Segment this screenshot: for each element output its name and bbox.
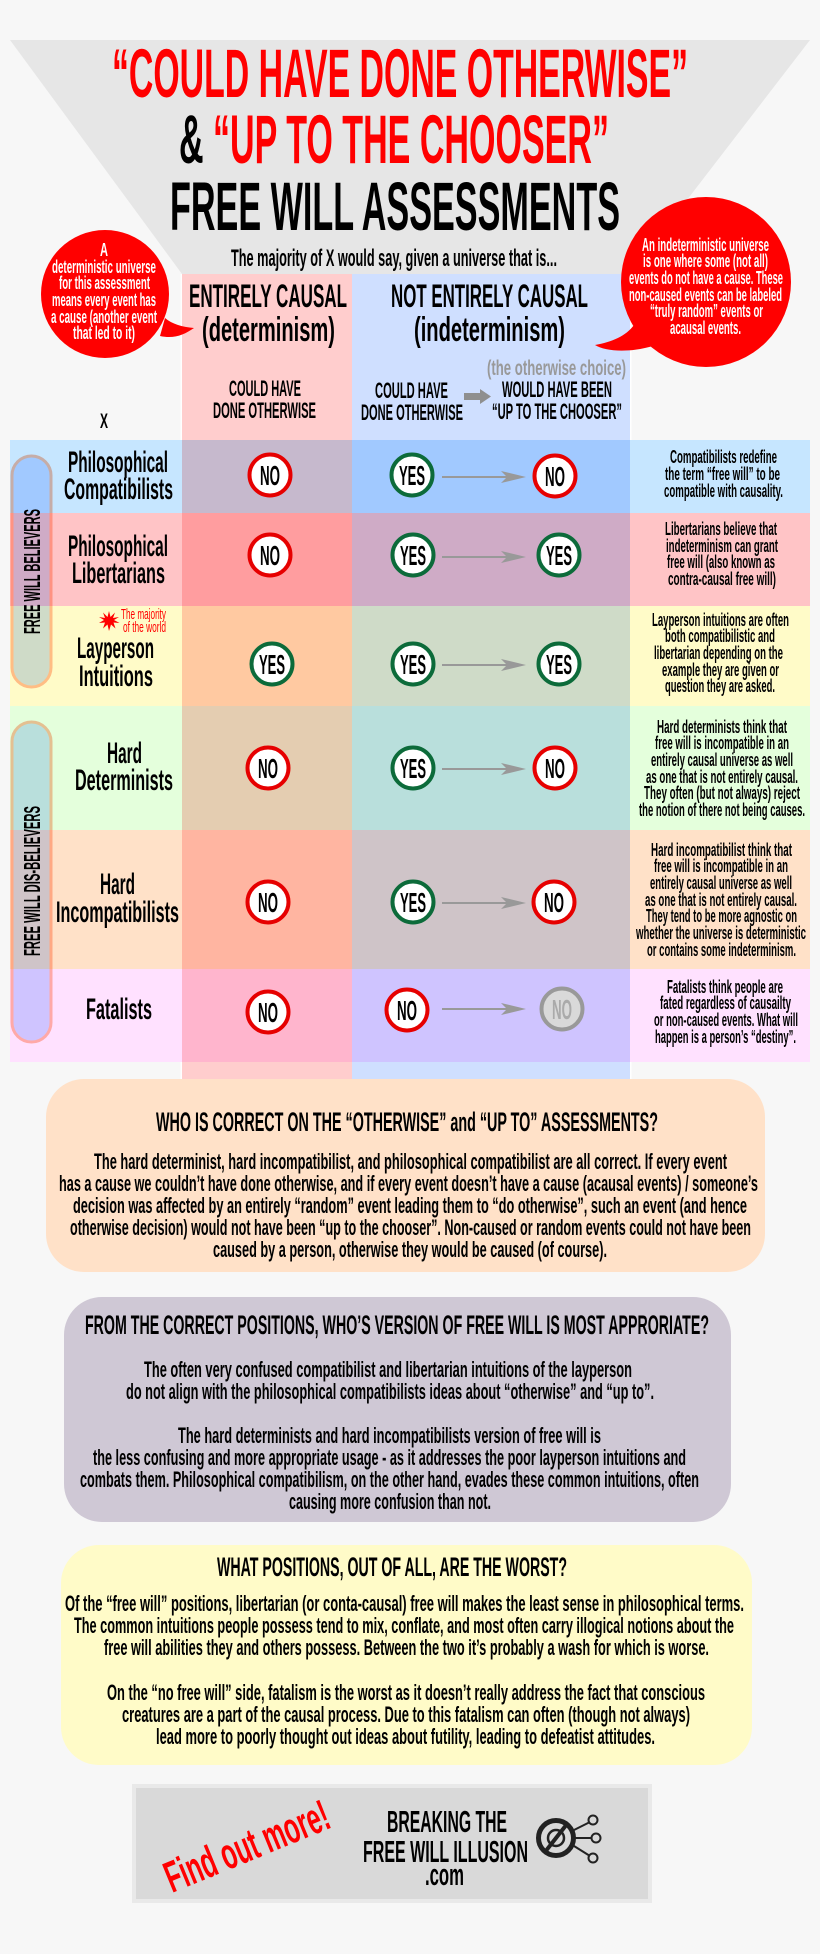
row: philosophical compatibilists: Philosophical	[68, 446, 168, 479]
arrow	[442, 1003, 526, 1015]
callout text: Find out more!	[157, 1791, 337, 1902]
column header: not entirely causal: DONE OTHERWISE	[361, 400, 463, 425]
row: fatalists: Fatalists	[86, 993, 152, 1026]
badge: yes	[392, 748, 434, 788]
row: hard determinists	[75, 717, 805, 820]
badge: no	[248, 882, 288, 922]
row: hard incompatibilists: Incompatibilists	[56, 896, 179, 929]
site name: .com	[425, 1857, 464, 1892]
panel: who is correct	[46, 1079, 765, 1272]
badge: greyed no: NO	[552, 994, 572, 1025]
description	[635, 840, 806, 960]
column header: entirely causal: (determinism)	[202, 311, 335, 349]
badge: no	[386, 990, 428, 1030]
badge: yes: YES	[400, 540, 426, 571]
row: layperson intuitions: Layperson	[77, 632, 154, 665]
description	[652, 610, 789, 696]
row: fatalists	[86, 977, 798, 1047]
row: hard incompatibilists: Hard	[100, 868, 135, 901]
row: philosophical libertarians: Philosophical	[68, 530, 168, 563]
column header: not entirely causal: “UP TO THE CHOOSER”	[492, 399, 622, 424]
column header: not entirely causal	[361, 278, 626, 425]
badge: no: NO	[260, 460, 280, 491]
row: layperson intuitions: Intuitions	[79, 660, 153, 693]
badge: no	[534, 882, 574, 922]
badge: yes	[538, 644, 580, 684]
column header: not entirely causal: (indeterminism)	[414, 311, 565, 349]
body text	[65, 1591, 744, 1749]
pill: free will dis-believers	[12, 722, 51, 1042]
column header: entirely causal: COULD HAVE	[229, 376, 301, 401]
badge: no: NO	[545, 753, 565, 784]
row: hard determinists: Hard	[107, 737, 142, 770]
badge: no: NO	[544, 887, 564, 918]
column header: entirely causal	[189, 278, 347, 423]
arrow	[442, 551, 526, 563]
text: FREE WILL BELIEVERS	[19, 509, 45, 634]
badge: no: NO	[397, 995, 417, 1026]
title	[112, 35, 688, 245]
description	[639, 717, 805, 820]
badge: yes: YES	[259, 649, 285, 680]
column header: entirely causal: ENTIRELY CAUSAL	[189, 278, 347, 314]
pill: free will believers	[12, 456, 51, 687]
arrow	[442, 471, 526, 483]
column header: not entirely causal: COULD HAVE	[375, 378, 448, 403]
callout: indeterministic universe	[595, 197, 791, 367]
column header: not entirely causal: WOULD HAVE BEEN	[502, 377, 612, 402]
callout: deterministic universe	[41, 230, 194, 358]
callout: deterministic universe: for this assessment	[59, 273, 150, 293]
badge: yes: YES	[400, 753, 426, 784]
callout: indeterministic universe: acausal events.	[670, 318, 741, 338]
description	[664, 447, 783, 501]
arrow: header	[464, 389, 491, 404]
badge: no	[534, 748, 576, 788]
badge: yes	[252, 644, 292, 684]
column header: not entirely causal: NOT ENTIRELY CAUSAL	[391, 278, 588, 314]
badge: no	[248, 748, 288, 788]
row: philosophical libertarians	[68, 519, 778, 590]
description	[665, 519, 778, 589]
callout: deterministic universe: that led to it)	[73, 323, 135, 343]
row: philosophical compatibilists: Compatibilists	[64, 473, 173, 506]
callout: deterministic universe: deterministic universe	[52, 257, 156, 277]
badge: yes	[392, 644, 434, 684]
badge: yes: YES	[400, 649, 426, 680]
badge: no: NO	[258, 753, 278, 784]
panel: worst positions	[61, 1545, 752, 1765]
note: the majority of the world: of the world	[123, 619, 166, 636]
site name	[363, 1804, 528, 1892]
panel: most appropriate version	[64, 1297, 731, 1522]
row: layperson intuitions	[77, 606, 789, 696]
badge: yes	[538, 534, 580, 576]
body text	[59, 1149, 758, 1262]
badge: yes	[392, 454, 432, 496]
note: the majority of the world	[121, 606, 166, 636]
badge: yes: YES	[399, 460, 425, 491]
badge: no	[250, 534, 290, 576]
description	[654, 977, 798, 1047]
badge: no: NO	[258, 887, 278, 918]
body text	[80, 1357, 699, 1514]
badge: no: NO	[260, 540, 280, 571]
body text: causing more confusion than not.	[289, 1489, 491, 1514]
badge: yes: YES	[546, 540, 572, 571]
column header: entirely causal: DONE OTHERWISE	[213, 398, 316, 423]
site name: FREE WILL ILLUSION	[363, 1834, 528, 1869]
arrow	[442, 897, 526, 909]
badge: no	[250, 454, 290, 496]
badge: no	[534, 456, 576, 496]
table: rows and columns	[10, 274, 810, 1079]
badge: yes	[392, 882, 434, 922]
text: FREE WILL DIS-BELIEVERS	[19, 806, 45, 956]
badge: no	[248, 992, 288, 1032]
column label: X: X	[100, 410, 108, 433]
callout: deterministic universe: a cause (another event	[51, 307, 157, 327]
title funnel background	[10, 40, 810, 274]
row: philosophical libertarians: Libertarians	[72, 557, 165, 590]
arrow	[442, 659, 526, 671]
callout: deterministic universe: means every event has	[52, 290, 156, 310]
column header: not entirely causal: (the otherwise choice)	[487, 357, 626, 380]
badge: no: NO	[545, 461, 565, 492]
badge: yes: YES	[546, 649, 572, 680]
site name: BREAKING THE	[387, 1804, 507, 1839]
badge: no: NO	[258, 997, 278, 1028]
arrow	[442, 763, 526, 775]
row: hard incompatibilists	[56, 840, 806, 960]
row: philosophical compatibilists	[64, 446, 783, 506]
banner: find out more	[134, 1786, 650, 1902]
badge: yes: YES	[400, 887, 426, 918]
badge: yes	[392, 534, 434, 576]
row: hard determinists: Determinists	[75, 764, 173, 797]
icon: logo	[538, 1816, 600, 1862]
icon: red burst	[99, 611, 120, 631]
callout: deterministic universe: A	[100, 240, 108, 260]
note: the majority of the world: The majority	[121, 606, 166, 623]
badge: greyed no	[542, 988, 582, 1030]
